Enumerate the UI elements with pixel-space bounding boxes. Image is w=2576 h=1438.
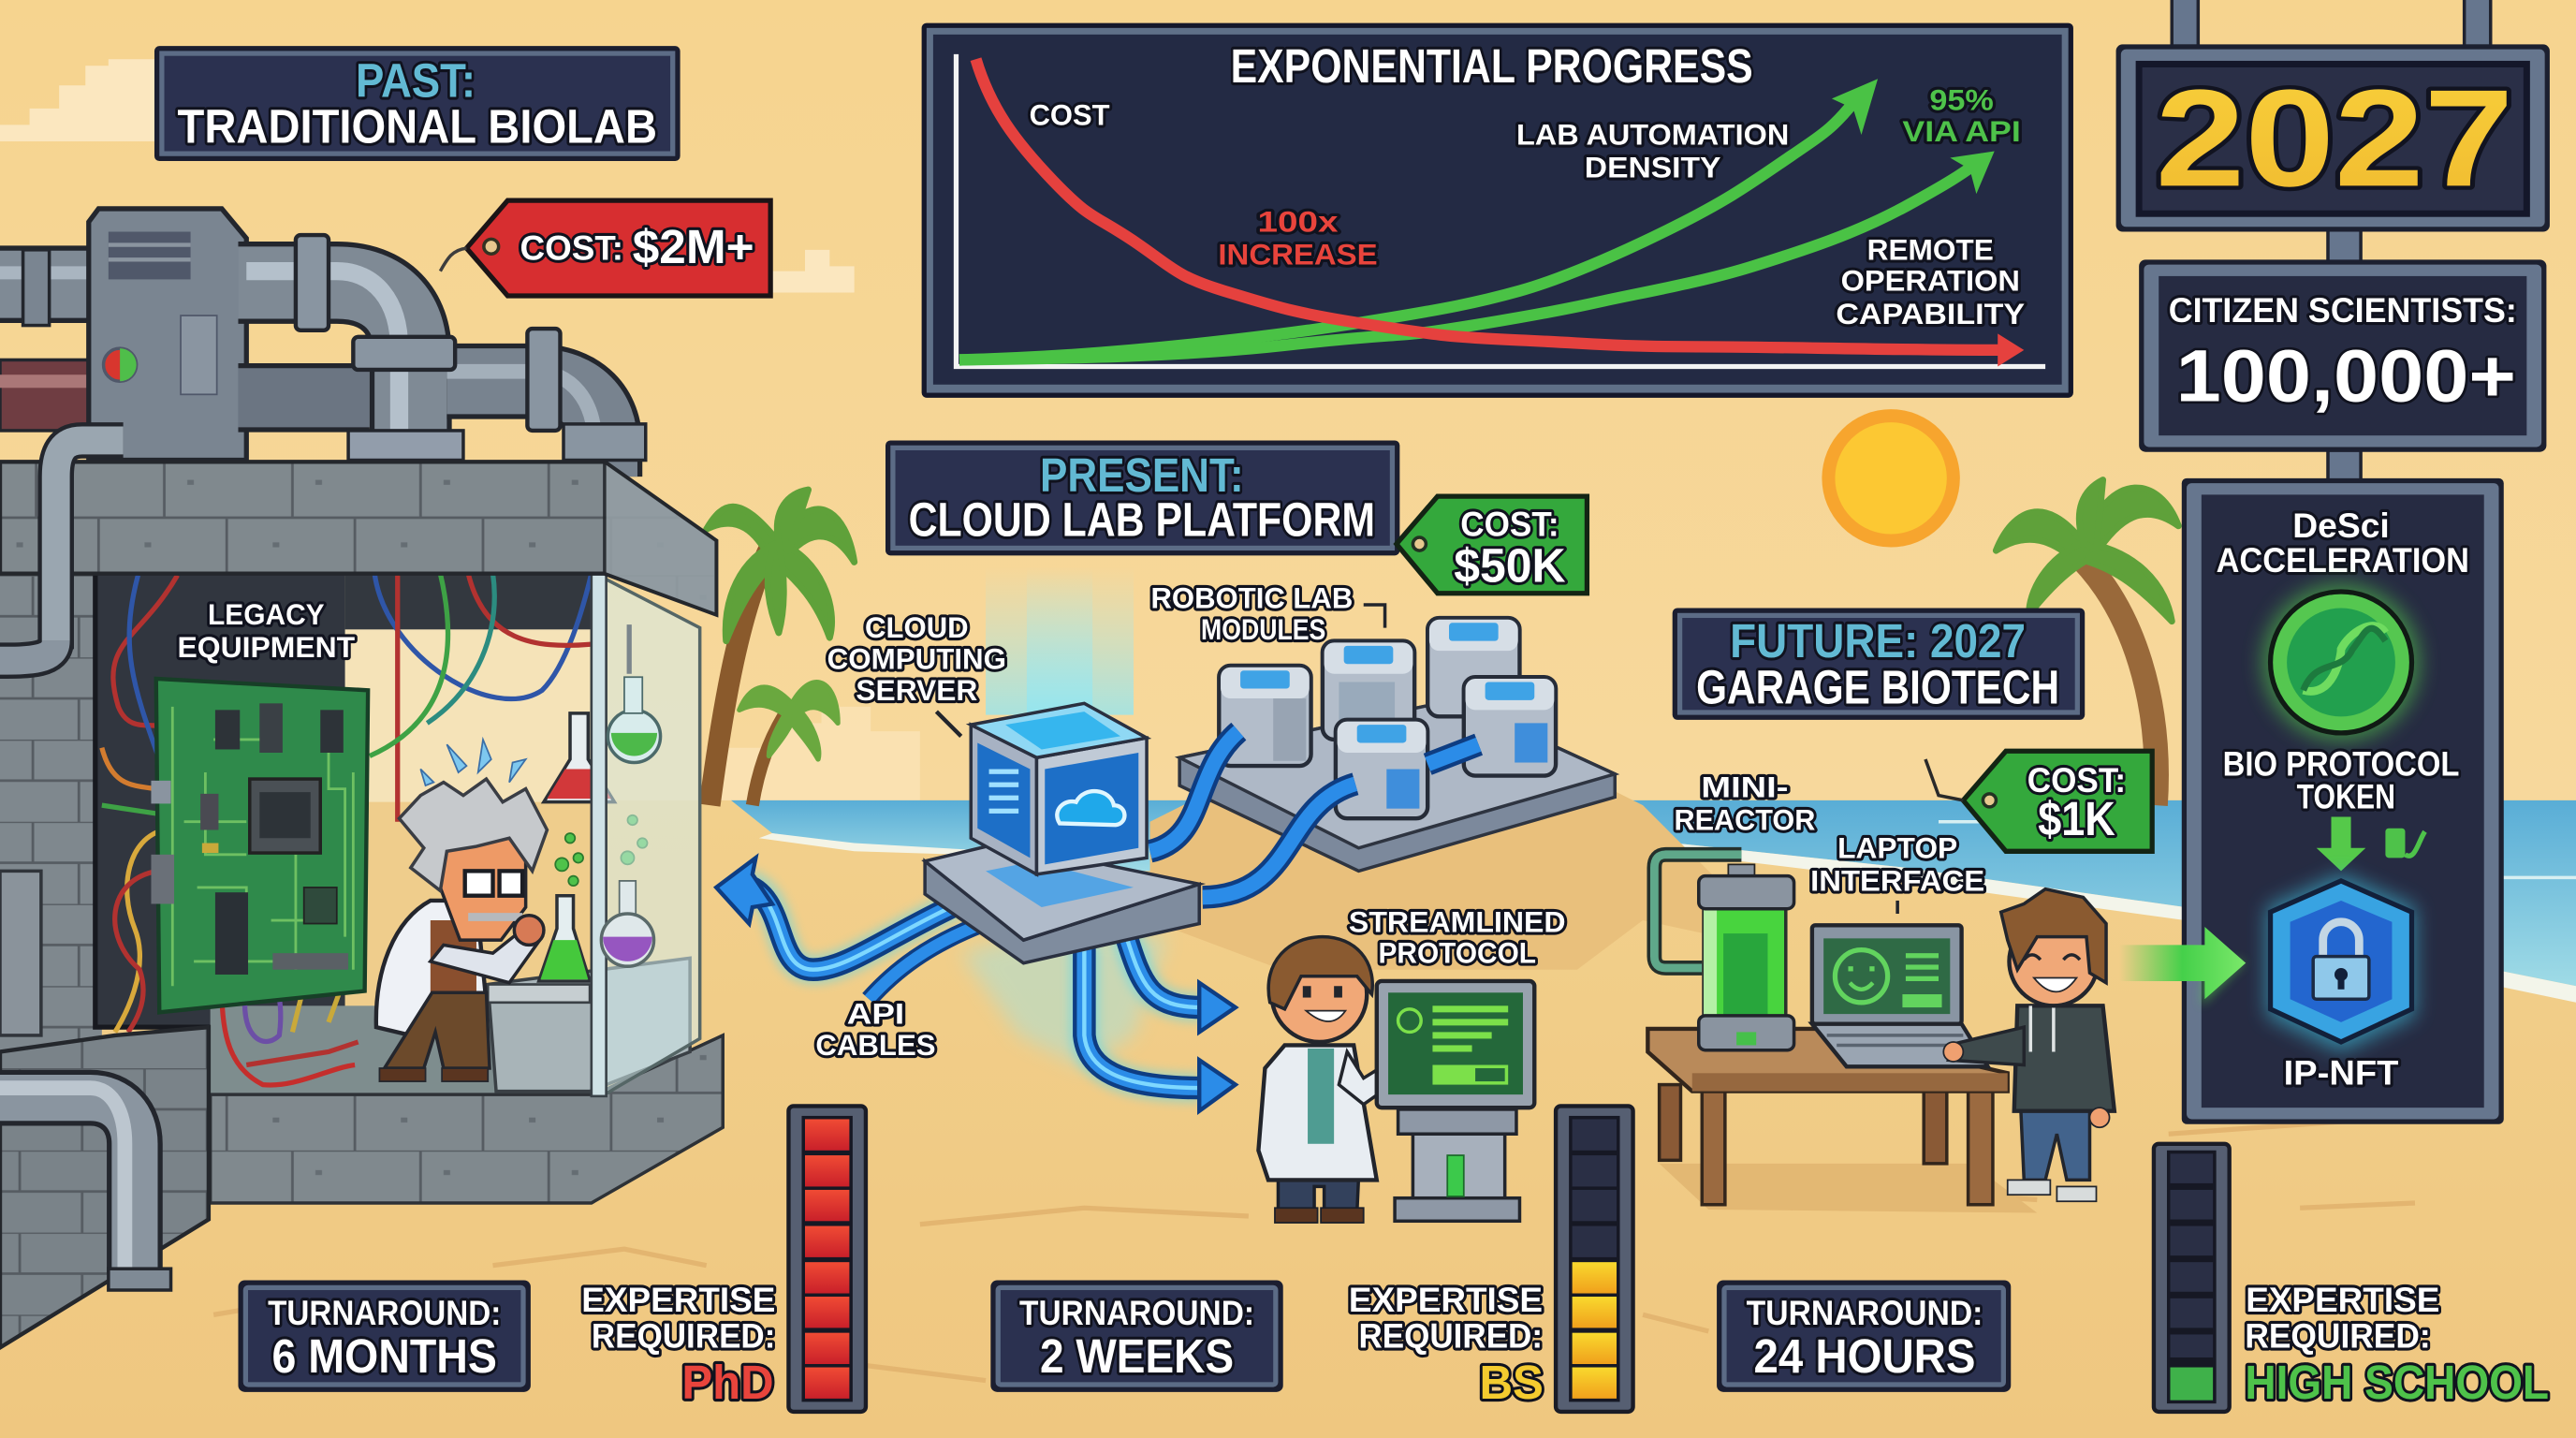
wall unit xyxy=(0,871,41,1035)
interior view: sand xyxy=(345,802,600,1016)
text: expertise high school xyxy=(2245,1281,2549,1409)
text: 100x increase xyxy=(1218,205,1378,271)
text: present: PRESENT: xyxy=(1040,448,1244,502)
laptop xyxy=(1812,925,1988,1066)
robotic module 3 xyxy=(1427,618,1519,716)
text: garage biotech: GARAGE BIOTECH xyxy=(1696,660,2059,713)
radiating light below server xyxy=(961,929,1166,1068)
text: $1K: $1K xyxy=(2038,792,2115,845)
lower left stone block xyxy=(0,1027,209,1347)
label: API cables: CABLES xyxy=(815,1028,936,1062)
illustration: traditional biolab xyxy=(0,209,723,1347)
sand dune xyxy=(1150,772,1758,970)
flask: red xyxy=(544,713,614,802)
text: $2M+: $2M+ xyxy=(633,220,754,273)
text: expertise BS: EXPERTISE xyxy=(1349,1281,1543,1319)
panel: turnaround past: 6 MONTHS xyxy=(271,1329,497,1383)
interior back wall xyxy=(95,567,350,1027)
text: remote operation capability: OPERATION xyxy=(1841,264,2020,298)
text: cost: COST: xyxy=(1460,505,1559,543)
left stone wall xyxy=(0,462,102,1053)
illustration: garage biotech xyxy=(1647,855,2115,1213)
panel: citizen scientists xyxy=(2139,259,2546,452)
expertise bar: high school xyxy=(2154,1144,2230,1412)
label: API cables xyxy=(815,997,936,1062)
mini-reactor xyxy=(1654,855,1794,1050)
label: mini-reactor: MINI- xyxy=(1701,770,1788,803)
label: mini-reactor xyxy=(1674,770,1816,836)
text: chart title: EXPONENTIAL PROGRESS xyxy=(1231,39,1753,93)
label: legacy equipment: LEGACY xyxy=(208,597,325,631)
label: legacy equipment xyxy=(178,597,355,664)
text: $50K: $50K xyxy=(1454,538,1566,592)
label: streamlined protocol xyxy=(1349,904,1566,970)
text: expertise BS: REQUIRED: xyxy=(1358,1316,1543,1355)
arrow: down xyxy=(2317,816,2365,871)
label: laptop interface: LAPTOP xyxy=(1837,830,1957,864)
glass front pillar and side panel xyxy=(592,574,700,1096)
text: token: TOKEN xyxy=(2297,778,2395,816)
rooftop pipes and machine xyxy=(0,209,646,477)
text: 95% via API xyxy=(1902,83,2021,148)
scientist: cloud lab xyxy=(1258,937,1426,1223)
curve: automation density xyxy=(959,79,1878,360)
interior upper band xyxy=(345,574,600,629)
text: expertise high school: REQUIRED: xyxy=(2245,1316,2431,1355)
panel: past heading xyxy=(154,46,681,161)
label: cloud computing server: CLOUD xyxy=(865,610,969,644)
server base xyxy=(925,844,1199,963)
panel: turnaround past: TURNAROUND: xyxy=(268,1294,501,1332)
text: 95% via API: VIA API xyxy=(1902,114,2021,148)
text: expertise PhD: PhD xyxy=(681,1356,774,1409)
label: laptop interface: INTERFACE xyxy=(1810,863,1984,897)
panel: year 2027 xyxy=(2116,44,2550,232)
panel: turnaround future: 24 HOURS xyxy=(1754,1329,1976,1383)
green bubbles xyxy=(555,815,648,886)
robotic module 4 xyxy=(1464,677,1556,776)
label: cloud computing server: COMPUTING xyxy=(827,641,1006,675)
label: robotic lab modules xyxy=(1150,581,1385,646)
background: sky xyxy=(0,0,2576,805)
label: API cables: API xyxy=(847,997,904,1031)
text: lab automation density: LAB AUTOMATION xyxy=(1516,117,1789,151)
text: PAST: PAST: xyxy=(356,54,476,108)
text: DeSci: DeSci xyxy=(2292,506,2390,545)
chart axes xyxy=(956,54,2045,366)
label: legacy equipment: EQUIPMENT xyxy=(178,630,355,664)
icon: bio protocol token xyxy=(2262,583,2420,741)
table xyxy=(1647,1029,2008,1205)
flask: hanging round xyxy=(607,624,661,763)
arrow heads xyxy=(716,858,1236,1111)
illustration: cloud lab platform xyxy=(716,567,1615,1223)
interior view: sky xyxy=(345,567,600,814)
text: 100x increase: 100x xyxy=(1258,205,1339,239)
icon: small plug xyxy=(2385,829,2425,858)
palm tree: left large xyxy=(707,490,855,805)
sea left xyxy=(731,800,1249,871)
panel: turnaround present xyxy=(990,1280,1283,1392)
ledge side shading xyxy=(605,462,716,615)
text: cloud lab platform: CLOUD LAB PLATFORM xyxy=(909,492,1375,546)
robotic module 5 xyxy=(1336,720,1427,818)
curve: cost xyxy=(976,59,2024,366)
panel: present heading xyxy=(886,440,1399,555)
science table xyxy=(488,958,690,1092)
panel: turnaround future xyxy=(1717,1280,2011,1392)
panel: future heading xyxy=(1673,609,2085,720)
flask: purple xyxy=(601,881,654,966)
text: lab automation density xyxy=(1516,117,1789,184)
expertise bar: PhD xyxy=(788,1106,866,1412)
robotic module 1 xyxy=(1219,666,1311,766)
bottom stone base xyxy=(211,1035,723,1203)
sand ripples xyxy=(213,1118,2415,1381)
person: hoodie xyxy=(1943,889,2115,1201)
clouds xyxy=(0,59,2073,800)
panel: turnaround present: TURNAROUND: xyxy=(1019,1294,1254,1332)
text: citizen scientists: CITIZEN SCIENTISTS: xyxy=(2169,291,2517,330)
cable glow xyxy=(748,884,1203,1088)
scientist: stressed professor xyxy=(376,779,547,1081)
text: traditional biolab: TRADITIONAL BIOLAB xyxy=(178,100,657,154)
text: expertise PhD: REQUIRED: xyxy=(592,1316,775,1355)
circuit board xyxy=(151,679,368,1012)
flask: red liquid xyxy=(547,770,611,799)
panel: turnaround future: TURNAROUND: xyxy=(1747,1294,1983,1332)
floor xyxy=(211,1005,598,1098)
robotic platform xyxy=(1179,700,1615,871)
text: remote operation capability: REMOTE xyxy=(1867,232,1994,266)
label: cloud computing server: SERVER xyxy=(856,673,977,707)
panel: exponential progress chart xyxy=(922,23,2073,398)
flask: green on bench xyxy=(539,896,590,981)
text: 100x increase: INCREASE xyxy=(1218,238,1378,271)
panel: turnaround present: 2 WEEKS xyxy=(1040,1329,1234,1383)
text: remote operation capability xyxy=(1836,232,2025,330)
text: lab automation density: DENSITY xyxy=(1585,151,1720,184)
label: robotic lab modules: ROBOTIC LAB xyxy=(1150,581,1353,615)
tag: cost $50K xyxy=(1397,496,1587,594)
label: laptop interface xyxy=(1810,830,1984,914)
curve: remote operation xyxy=(959,151,1995,360)
text: remote operation capability: CAPABILITY xyxy=(1836,297,2025,330)
label: robotic lab modules: MODULES xyxy=(1201,612,1325,646)
expertise bar: BS xyxy=(1556,1106,1633,1412)
icon: IP-NFT hexagon xyxy=(2267,874,2415,1051)
label: streamlined protocol: PROTOCOL xyxy=(1379,936,1536,970)
background: sand xyxy=(0,800,2576,1438)
palm tree: right xyxy=(1996,480,2178,805)
table shadow xyxy=(1660,1164,2037,1213)
sea right xyxy=(1618,800,2576,1003)
label: mini-reactor: REACTOR xyxy=(1674,802,1816,836)
server cube xyxy=(971,703,1147,874)
API cables xyxy=(742,731,1479,1088)
tangled wires xyxy=(102,574,592,1085)
arrow: green to IP-NFT xyxy=(2119,927,2246,1005)
text: expertise high school: EXPERTISE xyxy=(2246,1281,2439,1319)
protocol console xyxy=(1377,981,1534,1221)
text: future 2027: FUTURE: 2027 xyxy=(1730,614,2026,668)
roof ledge xyxy=(0,462,716,615)
blue light beams above server xyxy=(986,567,1134,715)
pipe: left riser xyxy=(0,440,124,661)
text: IP-NFT: IP-NFT xyxy=(2284,1054,2399,1093)
text: acceleration: ACCELERATION xyxy=(2217,541,2469,580)
text: 95% via API: 95% xyxy=(1929,83,1994,117)
text: cost: COST xyxy=(1030,97,1110,131)
text: 2027: 2027 xyxy=(2156,62,2513,215)
text: expertise BS xyxy=(1349,1281,1544,1409)
palm tree: small left xyxy=(739,682,838,805)
panel: turnaround past xyxy=(238,1280,531,1392)
label: cloud computing server xyxy=(827,610,1006,736)
pipe: lower elbow xyxy=(0,1088,171,1290)
sun xyxy=(1822,409,1960,548)
text: expertise PhD: EXPERTISE xyxy=(581,1281,775,1319)
text: cost label: COST: xyxy=(520,228,623,267)
tag: cost $2M+ xyxy=(440,200,770,296)
panel: DeSci acceleration xyxy=(2182,478,2504,1124)
text: cost: COST: xyxy=(2027,761,2126,800)
text: expertise PhD xyxy=(581,1281,775,1409)
robotic module 2 xyxy=(1323,641,1414,740)
text: expertise high school: HIGH SCHOOL xyxy=(2245,1356,2549,1409)
label: streamlined protocol: STREAMLINED xyxy=(1349,904,1566,938)
tag: cost $1K xyxy=(1925,751,2152,851)
sweat droplets xyxy=(420,740,526,785)
text: 100,000+: 100,000+ xyxy=(2176,334,2516,417)
text: bio protocol: BIO PROTOCOL xyxy=(2223,745,2459,784)
poles xyxy=(2172,0,2491,483)
text: expertise BS: BS xyxy=(1479,1356,1544,1409)
